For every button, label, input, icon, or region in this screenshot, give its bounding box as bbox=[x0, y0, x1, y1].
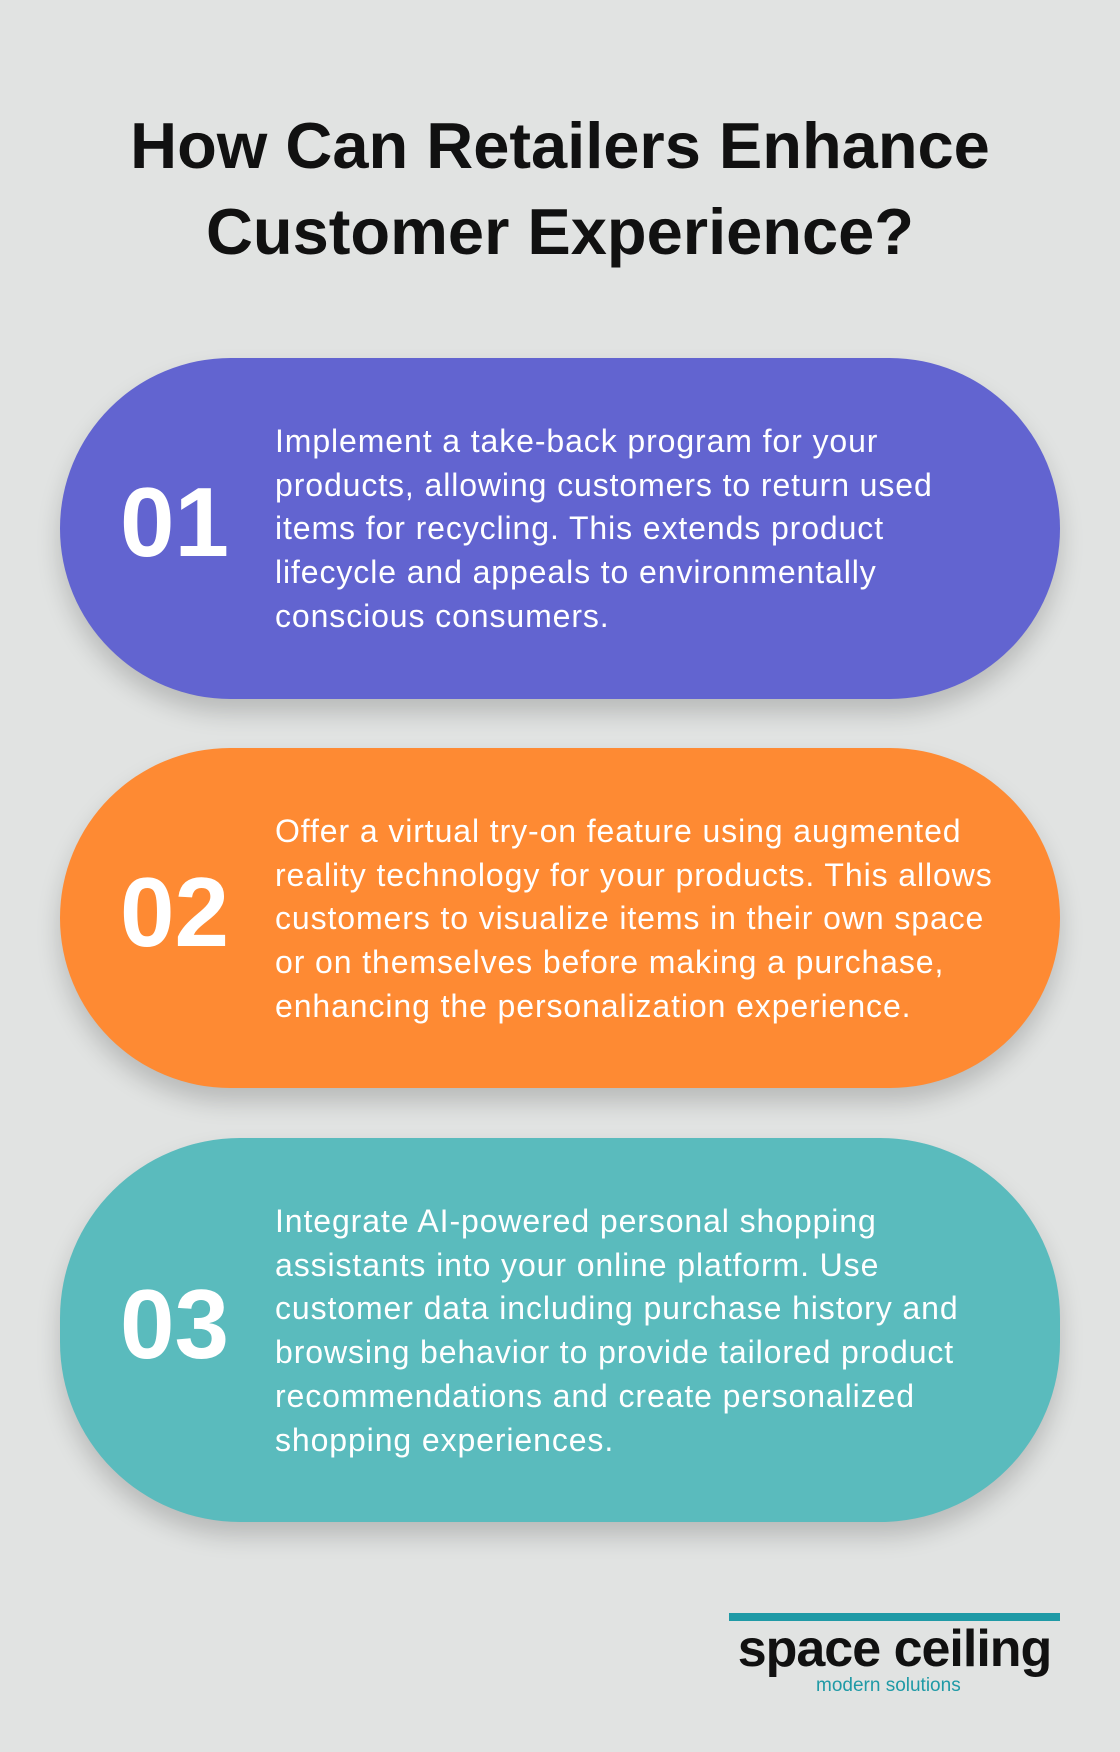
text 03: assistants into your online platform. Use bbox=[275, 1247, 879, 1283]
title: How Can Retailers Enhance bbox=[130, 109, 990, 182]
text 01: lifecycle and appeals to environmentally bbox=[275, 554, 877, 590]
number 02: 02 bbox=[120, 857, 229, 967]
title bbox=[130, 109, 990, 268]
text 03: shopping experiences. bbox=[275, 1422, 614, 1458]
logo bbox=[729, 1613, 1060, 1696]
text 03: recommendations and create personalized bbox=[275, 1378, 915, 1414]
text 02: or on themselves before making a purchase, bbox=[275, 944, 944, 980]
logo: space ceiling bbox=[738, 1620, 1051, 1678]
text 01: products, allowing customers to return used bbox=[275, 467, 933, 503]
text 01 bbox=[275, 423, 933, 634]
logo: modern solutions bbox=[816, 1675, 961, 1696]
number 03: 03 bbox=[120, 1269, 229, 1379]
title: Customer Experience? bbox=[206, 195, 914, 268]
text 01: items for recycling. This extends product bbox=[275, 510, 884, 546]
panel: step 03 bbox=[60, 1138, 1060, 1522]
text 02 bbox=[275, 813, 993, 1024]
panel: step 02 bbox=[60, 748, 1060, 1088]
text 02: enhancing the personalization experience. bbox=[275, 988, 911, 1024]
text 03: browsing behavior to provide tailored product bbox=[275, 1334, 954, 1370]
text 02: Offer a virtual try-on feature using augmented bbox=[275, 813, 962, 849]
number 01: 01 bbox=[120, 467, 229, 577]
text 02: customers to visualize items in their own space bbox=[275, 900, 984, 936]
text 03 bbox=[275, 1203, 959, 1458]
text 03: customer data including purchase history and bbox=[275, 1290, 959, 1326]
text 01: Implement a take-back program for your bbox=[275, 423, 878, 459]
text 02: reality technology for your products. This allows bbox=[275, 857, 993, 893]
panel: step 01 bbox=[60, 358, 1060, 699]
text 03: Integrate AI-powered personal shopping bbox=[275, 1203, 877, 1239]
text 01: conscious consumers. bbox=[275, 598, 610, 634]
